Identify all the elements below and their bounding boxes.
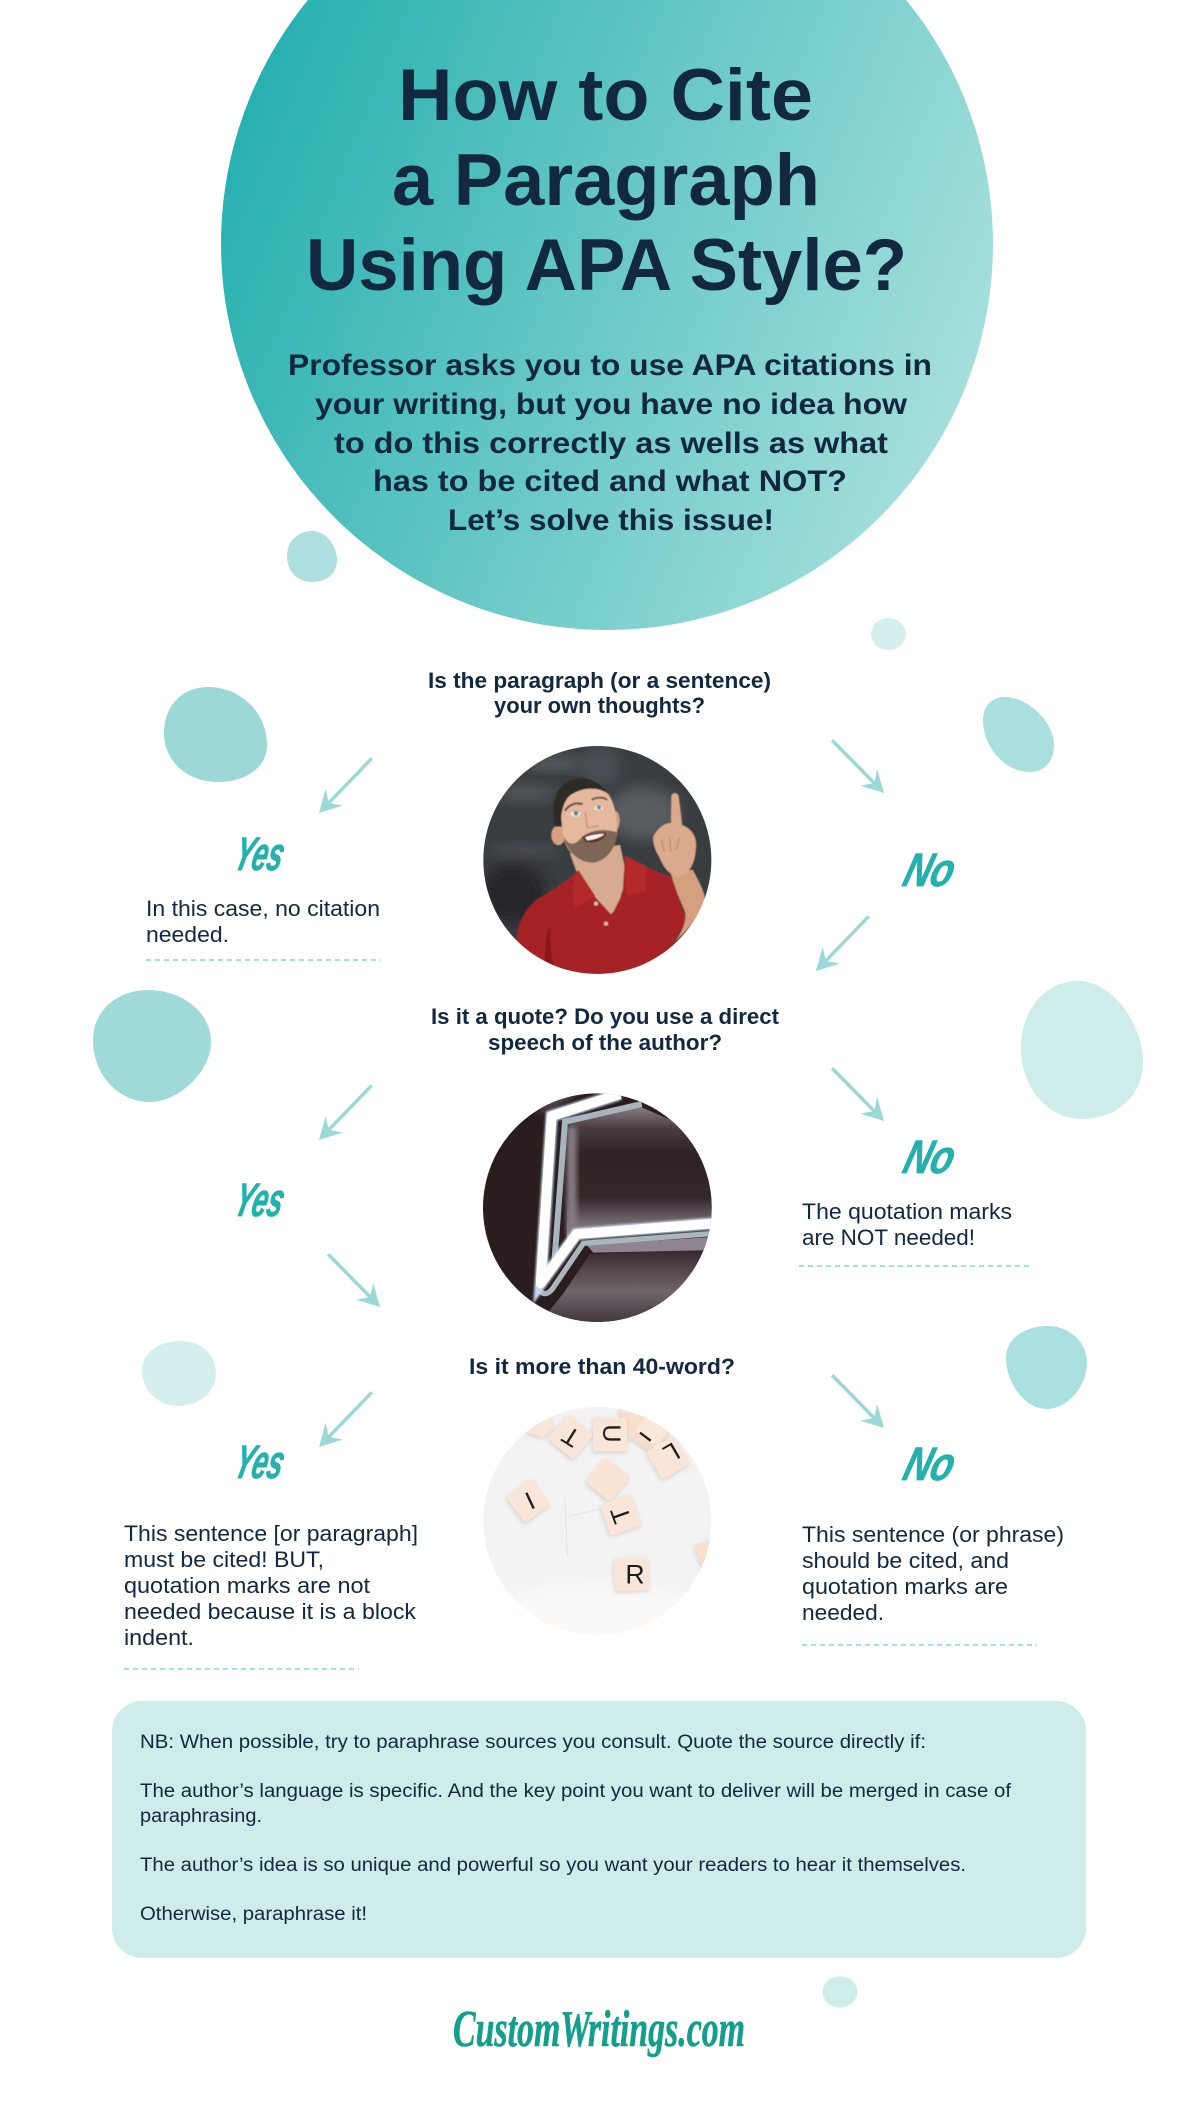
inner panel (567, 1107, 717, 1240)
photo: scrabble tiles (480, 1403, 728, 1643)
answer: must be cited: This sentence [or paragraph] (124, 1521, 418, 1546)
decorative blobs (93, 531, 1143, 2008)
yes 1: Yes (229, 829, 290, 881)
title: How to Cite (398, 55, 813, 136)
arrow: q1 to yes (310, 750, 380, 821)
answer: should be cited: needed. (802, 1600, 884, 1625)
photo: scrabble tiles: U (597, 1424, 625, 1442)
logo: CustomWritings.com (453, 2001, 745, 2058)
lower panel (549, 1249, 704, 1322)
answer: quotation marks not needed: are NOT needed! (802, 1225, 975, 1250)
note text: Otherwise, paraphrase it! (140, 1904, 367, 1925)
note text: The author’s idea is so unique and powerful so you want your readers to hear it themselves. (140, 1855, 966, 1876)
arrow: yes to q3 (320, 1246, 389, 1315)
photo: neon speech bubble (480, 1090, 717, 1327)
answer: must be cited: indent. (124, 1625, 194, 1650)
title: Using APA Style? (306, 225, 907, 306)
question 1 (428, 668, 771, 718)
question 2 (431, 1004, 780, 1055)
arrow: q3 to no (824, 1367, 893, 1436)
photo: scrabble tiles: T (557, 1420, 585, 1452)
ears (551, 826, 565, 845)
photo: scrabble tiles: R (625, 1559, 645, 1589)
answer: no citation needed: needed. (146, 922, 229, 947)
nose (585, 812, 598, 828)
answer: should be cited: should be cited, and (802, 1548, 1009, 1573)
note text: The author’s language is specific. And the key point you want to deliver will be merged in case of (140, 1781, 1012, 1802)
answer: must be cited (124, 1521, 418, 1669)
mouth (582, 833, 607, 843)
no 3: No (898, 1439, 962, 1491)
arm and hand (670, 870, 705, 942)
photo: scrabble tiles: T (605, 1503, 637, 1527)
answer: should be cited (802, 1522, 1064, 1645)
arrow: q3 to yes (310, 1384, 380, 1455)
answer: quotation marks not needed: The quotation marks (802, 1199, 1012, 1224)
photo: scrabble tiles: I (521, 1487, 539, 1515)
note text: NB: When possible, try to paraphrase sources you consult. Quote the source directly if: (140, 1732, 926, 1753)
header circle (221, 0, 993, 630)
panel: note (112, 1701, 1086, 1958)
yes 3: Yes (229, 1437, 290, 1489)
title (306, 55, 907, 306)
intro text: to do this correctly as wells as what (334, 427, 888, 460)
shirt (513, 856, 686, 983)
arrow: q2 to no (824, 1060, 893, 1129)
arrow: q1 to no (824, 732, 893, 801)
note text (140, 1732, 1012, 1925)
answer: must be cited: must be cited! BUT, (124, 1547, 324, 1572)
arrow: q2 to yes (310, 1077, 380, 1148)
answer: must be cited: quotation marks are not (124, 1573, 370, 1598)
beard (563, 830, 617, 863)
answer: no citation needed: In this case, no citation (146, 896, 380, 921)
question 1: your own thoughts? (494, 693, 705, 718)
question 2: speech of the author? (488, 1030, 722, 1055)
question 1: Is the paragraph (or a sentence) (428, 668, 771, 693)
question 2: Is it a quote? Do you use a direct (431, 1004, 780, 1029)
photo: scrabble tiles: L (658, 1436, 684, 1468)
neon tube (541, 1094, 715, 1283)
intro text: your writing, but you have no idea how (315, 388, 908, 421)
yes 2: Yes (229, 1175, 290, 1227)
photo: man pointing up (480, 743, 717, 983)
intro text: Let’s solve this issue! (448, 504, 774, 537)
arrow: no to q2 (807, 908, 877, 979)
no 1: No (898, 845, 962, 897)
intro text: Professor asks you to use APA citations in (288, 349, 932, 382)
intro text (288, 349, 932, 537)
answer: must be cited: needed because it is a block (124, 1599, 417, 1624)
no 2: No (898, 1132, 962, 1184)
answer: no citation needed (146, 896, 381, 960)
intro text: has to be cited and what NOT? (373, 465, 847, 498)
answer: should be cited: quotation marks are (802, 1574, 1008, 1599)
note text: paraphrasing. (140, 1806, 262, 1827)
answer: should be cited: This sentence (or phrase) (802, 1522, 1064, 1547)
question 3: Is it more than 40-word? (469, 1354, 735, 1379)
eyes (570, 811, 581, 817)
glass tubes (554, 1104, 642, 1267)
answer: quotation marks not needed (799, 1199, 1033, 1266)
hair (553, 778, 608, 827)
title: a Paragraph (392, 140, 820, 221)
face (560, 788, 618, 854)
neck (570, 845, 627, 917)
